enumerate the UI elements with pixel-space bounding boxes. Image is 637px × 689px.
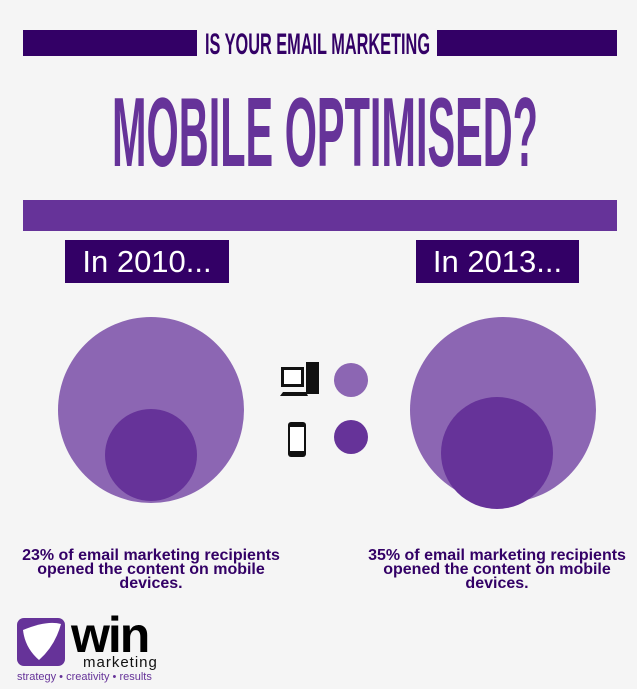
chart: circles (58, 317, 596, 509)
label: 2010 (65, 240, 229, 283)
caption 2013: 35% of email marketing recipients opened the content on mobile devices. (368, 547, 626, 592)
logo: marketing (83, 654, 158, 671)
logo (17, 607, 158, 683)
logo icon (17, 618, 65, 666)
header bar left (23, 30, 197, 56)
header bar right (437, 30, 617, 56)
circle chart 2010 (58, 317, 244, 503)
title underline bar (23, 200, 617, 231)
logo: strategy • creativity • results (17, 671, 152, 683)
label: 2013: In 2013... (433, 244, 562, 279)
circle chart 2013 (410, 317, 596, 509)
legend: mobile (288, 420, 368, 457)
legend: desktop (280, 362, 368, 397)
label: 2013 (416, 240, 579, 283)
logo wordmark: win (71, 607, 148, 663)
caption 2010: 23% of email marketing recipients opened the content on mobile devices. (22, 547, 280, 592)
label: 2010: In 2010... (82, 244, 212, 279)
